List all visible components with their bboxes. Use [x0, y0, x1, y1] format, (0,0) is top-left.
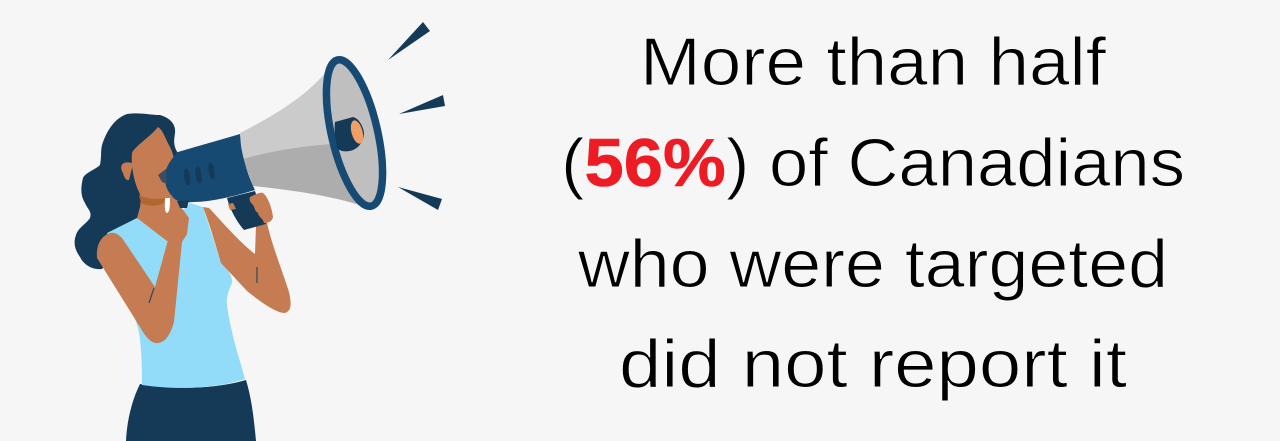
line 2: (56%) of Canadians	[561, 125, 1185, 201]
face and neck	[132, 127, 186, 241]
driver highlight	[349, 119, 365, 145]
signal bottom	[398, 187, 442, 210]
signal middle	[399, 95, 445, 114]
megaphone horn	[240, 72, 345, 160]
jaw shadow	[139, 195, 165, 206]
mouthpiece	[158, 169, 167, 184]
ear	[121, 162, 133, 180]
line 1: More than half	[640, 24, 1106, 100]
megaphone body	[165, 134, 255, 202]
skirt	[126, 380, 256, 441]
signal top	[388, 22, 430, 60]
speaker driver	[335, 117, 365, 151]
headline	[561, 24, 1185, 402]
mouth inner	[315, 55, 394, 211]
illustration: woman with megaphone	[75, 55, 394, 441]
front handle stub	[177, 200, 189, 208]
horn mouth	[315, 55, 394, 211]
chin band	[165, 198, 170, 213]
top	[107, 203, 245, 388]
right arm	[203, 207, 291, 313]
elbow crease	[256, 267, 258, 283]
signal lines	[388, 22, 445, 210]
horn shadow	[243, 144, 366, 207]
grip ridges	[183, 162, 216, 186]
line 3: who were targeted	[577, 226, 1168, 302]
forearm crease	[149, 288, 154, 303]
left arm	[97, 203, 189, 343]
hair	[75, 113, 178, 269]
right hand	[250, 193, 273, 223]
handle	[227, 191, 266, 230]
line 4: did not report it	[619, 326, 1127, 402]
right hand thumb	[228, 203, 236, 210]
